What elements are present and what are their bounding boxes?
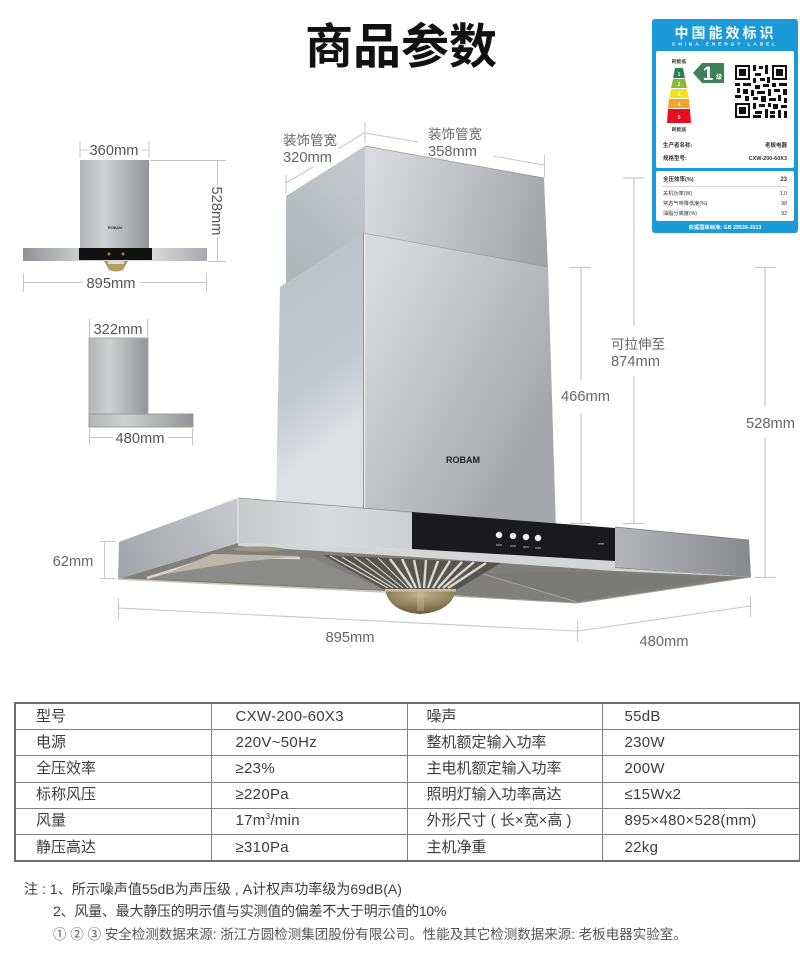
efficiency pyramid: 耗能高: [672, 126, 686, 133]
lower white panel: [656, 171, 794, 221]
dimension: duct 358mm: 358mm: [428, 144, 477, 160]
specification table: ≥310Pa: [236, 839, 289, 856]
dimension: 874mm: 874mm: [611, 354, 660, 370]
efficiency data: 关机功率(W): [663, 189, 692, 197]
dimension: front 528mm: [150, 160, 226, 262]
specification table: ≥23%: [236, 760, 275, 777]
dimension: duct 320mm: 装饰管宽: [283, 132, 337, 148]
specification table: ≤15Wx2: [624, 786, 681, 803]
specification table: 220V~50Hz: [236, 734, 317, 751]
lower chimney: [276, 233, 556, 530]
manufacturer and model: 规格型号:: [663, 154, 687, 162]
specification table: 整机额定输入功率: [426, 734, 547, 751]
dimension: duct 320mm: 320mm: [283, 150, 332, 166]
dimension: front 528mm: 528mm: [208, 187, 224, 235]
main range hood: [118, 146, 751, 614]
front view drawing: [23, 160, 207, 272]
efficiency pyramid: 4: [678, 102, 681, 108]
specification table: 200W: [624, 760, 665, 777]
specification table: 主机净重: [426, 839, 487, 856]
dimension: 874mm: [611, 178, 665, 524]
specification table: 外形尺寸 ( 长×宽×高 ): [426, 812, 572, 829]
specification table: 静压高达: [36, 839, 96, 856]
specification table: 22kg: [624, 839, 658, 856]
dimension: 480mm: 480mm: [640, 634, 688, 650]
dimension: side 480mm: [90, 428, 192, 447]
hood front band left: [238, 498, 414, 549]
dimension: 62mm: [53, 542, 116, 578]
specification table: ≥220Pa: [236, 786, 289, 803]
specification table: 17m3/min: [236, 812, 300, 829]
specification table: 895×480×528(mm): [624, 812, 757, 829]
grade arrow: [693, 63, 724, 85]
hood front band right: [615, 527, 751, 577]
energy label subheading: CHINA ENERGY LABEL: [672, 42, 778, 48]
hood left side: [118, 498, 238, 579]
note 1: 注 : 1、所示噪声值55dB为声压级 , A计权声功率级为69dB(A): [24, 881, 402, 897]
specification table: 照明灯输入功率高达: [426, 786, 562, 803]
specification table: 噪声: [426, 708, 457, 725]
efficiency data: 23: [780, 177, 788, 183]
upper chimney: [286, 146, 548, 290]
specification table: 主电机额定输入功率: [426, 760, 562, 777]
dimension: duct 320mm: [283, 132, 364, 194]
specification table: 风量: [36, 812, 66, 829]
efficiency data: [662, 175, 788, 217]
dimension: front 895mm: [24, 273, 206, 292]
efficiency pyramid: 3: [678, 92, 681, 98]
efficiency pyramid: 2: [678, 82, 681, 88]
efficiency data: 常态气味降低度(%): [663, 199, 708, 207]
dimension: 528mm: [746, 268, 795, 578]
dimension: side 322mm: 322mm: [94, 322, 142, 338]
dimension: 466mm: 466mm: [561, 389, 610, 405]
manufacturer and model: 生产者名称:: [663, 141, 693, 149]
side view drawing: [89, 338, 193, 427]
note 2: 2、风量、最大静压的明示值与实测值的偏差不大于明示值的10%: [53, 903, 446, 919]
lamp dome: [385, 589, 456, 614]
standard footer: 依据国家标准: GB 29539-2013: [689, 223, 761, 231]
manufacturer and model: CXW-200-60X3: [749, 156, 787, 162]
dimension: front 895mm: 895mm: [87, 276, 135, 292]
manufacturer and model: 老板电器: [765, 141, 787, 149]
energy label: [652, 19, 798, 233]
grade arrow: 级: [716, 73, 722, 81]
efficiency data: 油脂分离度(%): [663, 209, 697, 217]
dimension: duct 358mm: 装饰管宽: [428, 126, 482, 142]
dimension: 528mm: 528mm: [746, 416, 795, 432]
specification table: [14, 702, 800, 862]
control panel: [412, 512, 615, 561]
specification table: 型号: [36, 708, 66, 725]
dimension: 480mm: [578, 597, 750, 650]
specification table: 标称风压: [36, 786, 96, 803]
upper white panel: [656, 51, 794, 168]
dimension: 466mm: [561, 268, 610, 524]
efficiency pyramid: [667, 58, 691, 133]
dimension: 874mm: 可拉伸至: [611, 337, 665, 352]
efficiency data: 92: [781, 211, 787, 217]
dimension: front 360mm: [80, 141, 149, 159]
trim strip: [238, 543, 751, 577]
efficiency data: 1.0: [780, 191, 787, 197]
front view drawing: ROBAM: [108, 226, 122, 230]
QR code: [735, 65, 787, 118]
specification table: CXW-200-60X3: [236, 708, 344, 725]
efficiency pyramid: 5: [678, 115, 681, 121]
energy label heading: 中国能效标识: [674, 25, 776, 41]
efficiency data: 全压效率(%): [663, 175, 694, 183]
specification table: 电源: [36, 734, 66, 751]
data source note: ① ② ③ 安全检测数据来源: 浙江方圆检测集团股份有限公司。性能及其它检测数据来源: 老板电器实验室。: [53, 927, 687, 942]
efficiency pyramid: 耗能低: [672, 58, 686, 65]
specification table: 55dB: [624, 708, 661, 725]
dimension: side 480mm: 480mm: [116, 431, 164, 447]
dimension: 62mm: 62mm: [53, 554, 93, 570]
hood body: [118, 498, 751, 603]
underside: [118, 543, 751, 603]
title: 商品参数: [305, 21, 497, 74]
specification table: 230W: [624, 734, 665, 751]
fan grille: [323, 555, 501, 590]
dimension: duct 358mm: [365, 122, 544, 177]
specification table: 全压效率: [36, 760, 96, 777]
efficiency data: 98: [781, 201, 787, 207]
dimension: 895mm: 895mm: [326, 630, 374, 646]
vents: [233, 546, 283, 552]
manufacturer and model: [663, 141, 787, 162]
brand logo: ROBAM: [446, 455, 480, 465]
dimension: front 360mm: 360mm: [90, 143, 138, 159]
efficiency pyramid: 1: [678, 72, 681, 78]
grade arrow: 1: [703, 64, 714, 85]
dimension: 895mm: [118, 598, 578, 646]
